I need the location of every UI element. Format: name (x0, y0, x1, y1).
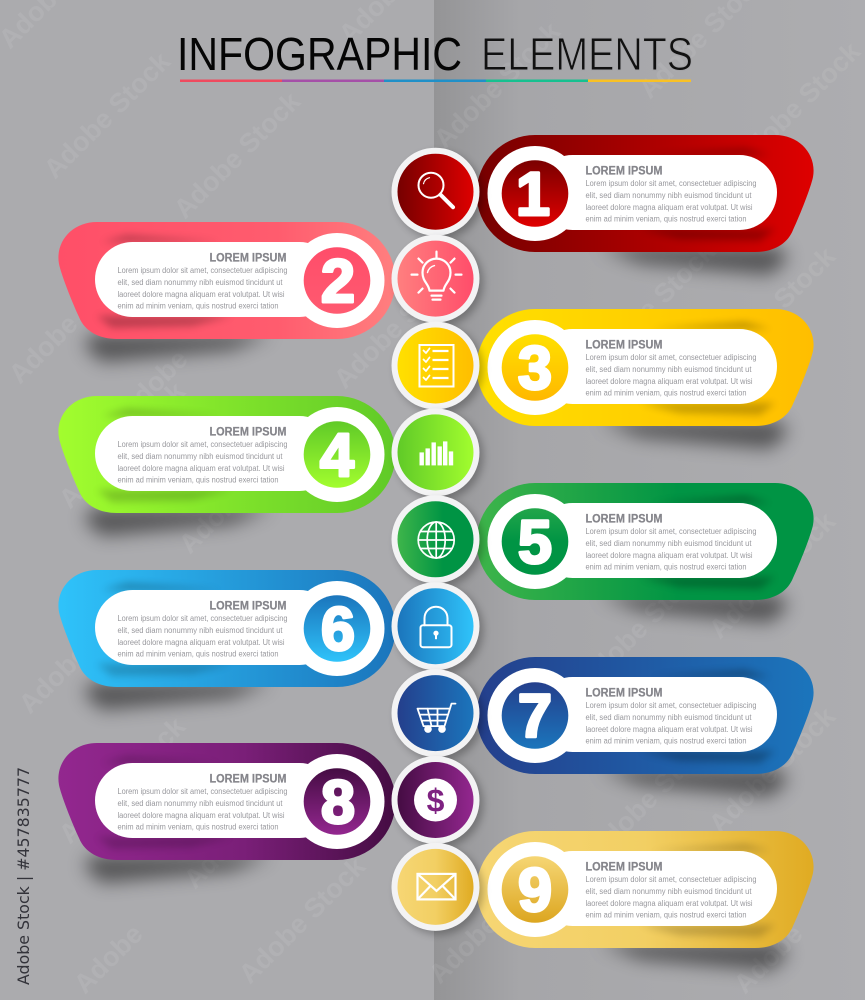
icon: envelope (392, 843, 484, 935)
panel 2: 2 (321, 247, 355, 315)
title (177, 28, 693, 80)
panel 3: enim ad minim veniam, quis nostrud exerci tation (586, 389, 746, 398)
title: INFOGRAPHIC (177, 28, 462, 80)
panel 3 (477, 309, 814, 449)
panel 1: laoreet dolore magna aliquam erat volutpat. Ut wisi (586, 203, 753, 212)
panel 3: elit, sed diam nonummy nibh euismod tincidunt ut (586, 365, 752, 374)
icon: dollar (392, 756, 484, 848)
panel 4: elit, sed diam nonummy nibh euismod tincidunt ut (118, 452, 283, 461)
panel 8: 8 (321, 768, 355, 836)
panel 3: Lorem ipsum dolor sit amet, consectetuer adipiscing (586, 353, 756, 362)
panel 7: elit, sed diam nonummy nibh euismod tincidunt ut (586, 713, 752, 722)
panel 4: 4 (320, 421, 354, 489)
icon: padlock (392, 582, 484, 674)
panel 5: laoreet dolore magna aliquam erat volutpat. Ut wisi (586, 551, 753, 560)
icon: dollar: $ (427, 782, 445, 818)
text: Adobe Stock (178, 756, 317, 894)
icon: light bulb (392, 235, 484, 327)
text: Adobe Stock (428, 16, 567, 154)
panel 6: elit, sed diam nonummy nibh euismod tincidunt ut (118, 626, 283, 635)
text: Adobe Stock (233, 851, 372, 989)
panel 8: enim ad minim veniam, quis nostrud exerci tation (118, 823, 278, 832)
panel 1: Lorem ipsum dolor sit amet, consectetuer adipiscing (586, 179, 756, 188)
panel 9: elit, sed diam nonummy nibh euismod tincidunt ut (586, 887, 752, 896)
panel 2: Lorem ipsum dolor sit amet, consectetuer adipiscing (118, 266, 288, 275)
panel 6: 6 (321, 595, 355, 663)
text: Adobe Stock (703, 241, 842, 379)
text: Adobe Stock (53, 376, 192, 514)
panel 7: Lorem ipsum dolor sit amet, consectetuer adipiscing (586, 701, 756, 710)
icon: magnifier (392, 148, 484, 240)
text: Adobe (173, 479, 254, 559)
text: Adobe (68, 919, 149, 999)
panel 9: 9 (518, 856, 552, 924)
panel 7: LOREM IPSUM (586, 686, 662, 700)
text: Adobe Stock (728, 36, 865, 174)
panel 9: enim ad minim veniam, quis nostrud exerci tation (586, 911, 746, 920)
panel 6: LOREM IPSUM (210, 599, 286, 613)
stock id label: Adobe Stock | #457835777 (14, 767, 33, 985)
text: Adobe Stock (328, 256, 467, 394)
text: Adobe Stock (703, 701, 842, 839)
panel 6: laoreet dolore magna aliquam erat volutpat. Ut wisi (118, 638, 285, 647)
panel 4: laoreet dolore magna aliquam erat volutpat. Ut wisi (118, 464, 285, 473)
panel 1: enim ad minim veniam, quis nostrud exerci tation (586, 215, 746, 224)
panel 4: enim ad minim veniam, quis nostrud exerci tation (118, 476, 278, 485)
panel 9 (477, 831, 814, 971)
panel 8: laoreet dolore magna aliquam erat volutpat. Ut wisi (118, 811, 285, 820)
panel 7: laoreet dolore magna aliquam erat volutpat. Ut wisi (586, 725, 753, 734)
panel 6: enim ad minim veniam, quis nostrud exerci tation (118, 650, 278, 659)
panel 6 (58, 570, 396, 710)
text: Adobe Stock (53, 711, 192, 849)
panel 9: LOREM IPSUM (586, 860, 662, 874)
panel 9: laoreet dolore magna aliquam erat volutpat. Ut wisi (586, 899, 753, 908)
panel 4 (58, 396, 396, 536)
panel 2: LOREM IPSUM (210, 251, 286, 265)
panel 5: elit, sed diam nonummy nibh euismod tincidunt ut (586, 539, 752, 548)
panel 5: LOREM IPSUM (586, 512, 662, 526)
text: Adobe (13, 639, 94, 719)
panel 5: enim ad minim veniam, quis nostrud exerci tation (586, 563, 746, 572)
title underline (180, 80, 691, 82)
panel 5: Lorem ipsum dolor sit amet, consectetuer adipiscing (586, 527, 756, 536)
panel 2: enim ad minim veniam, quis nostrud exerci tation (118, 302, 278, 311)
text: Adobe Stock (583, 726, 722, 864)
panel 7: enim ad minim veniam, quis nostrud exerci tation (586, 737, 746, 746)
text: Adobe Stock (583, 236, 722, 374)
panel 3: LOREM IPSUM (586, 338, 662, 352)
panel 2: laoreet dolore magna aliquam erat volutpat. Ut wisi (118, 290, 285, 299)
panel 4: LOREM IPSUM (210, 425, 286, 439)
panel 5 (477, 483, 814, 623)
panel 1: 1 (516, 160, 550, 228)
panel 1 (477, 135, 814, 275)
panel 2 (58, 222, 396, 362)
panel 8: elit, sed diam nonummy nibh euismod tincidunt ut (118, 799, 283, 808)
panel 3: laoreet dolore magna aliquam erat volutpat. Ut wisi (586, 377, 753, 386)
text: Adobe (3, 309, 84, 389)
panel 1: elit, sed diam nonummy nibh euismod tincidunt ut (586, 191, 752, 200)
text: Adobe (423, 909, 504, 989)
text: Adobe (113, 344, 194, 424)
panel 5: 5 (518, 508, 552, 576)
panel 8 (58, 743, 396, 883)
panel 2: elit, sed diam nonummy nibh euismod tincidunt ut (118, 278, 283, 287)
icon: globe (392, 495, 484, 587)
text: Adobe Stock (703, 506, 842, 644)
text: Adobe (728, 919, 809, 999)
panel 1: LOREM IPSUM (586, 164, 662, 178)
panel 9: Lorem ipsum dolor sit amet, consectetuer adipiscing (586, 875, 756, 884)
panel 8: Lorem ipsum dolor sit amet, consectetuer adipiscing (118, 787, 288, 796)
text: Adobe Stock (168, 86, 307, 224)
panel 6: Lorem ipsum dolor sit amet, consectetuer adipiscing (118, 614, 288, 623)
text: Adobe Stock (38, 46, 177, 184)
panel 7 (477, 657, 814, 797)
panel 4: Lorem ipsum dolor sit amet, consectetuer adipiscing (118, 440, 288, 449)
icon: checklist (392, 322, 484, 414)
icon: bar chart (392, 408, 484, 500)
panel 8: LOREM IPSUM (210, 772, 286, 786)
icon: shopping cart (392, 669, 484, 761)
panel 3: 3 (518, 334, 552, 402)
title: ELEMENTS (481, 28, 693, 80)
text: Adobe Stock (573, 556, 712, 694)
panel 7: 7 (518, 682, 552, 750)
